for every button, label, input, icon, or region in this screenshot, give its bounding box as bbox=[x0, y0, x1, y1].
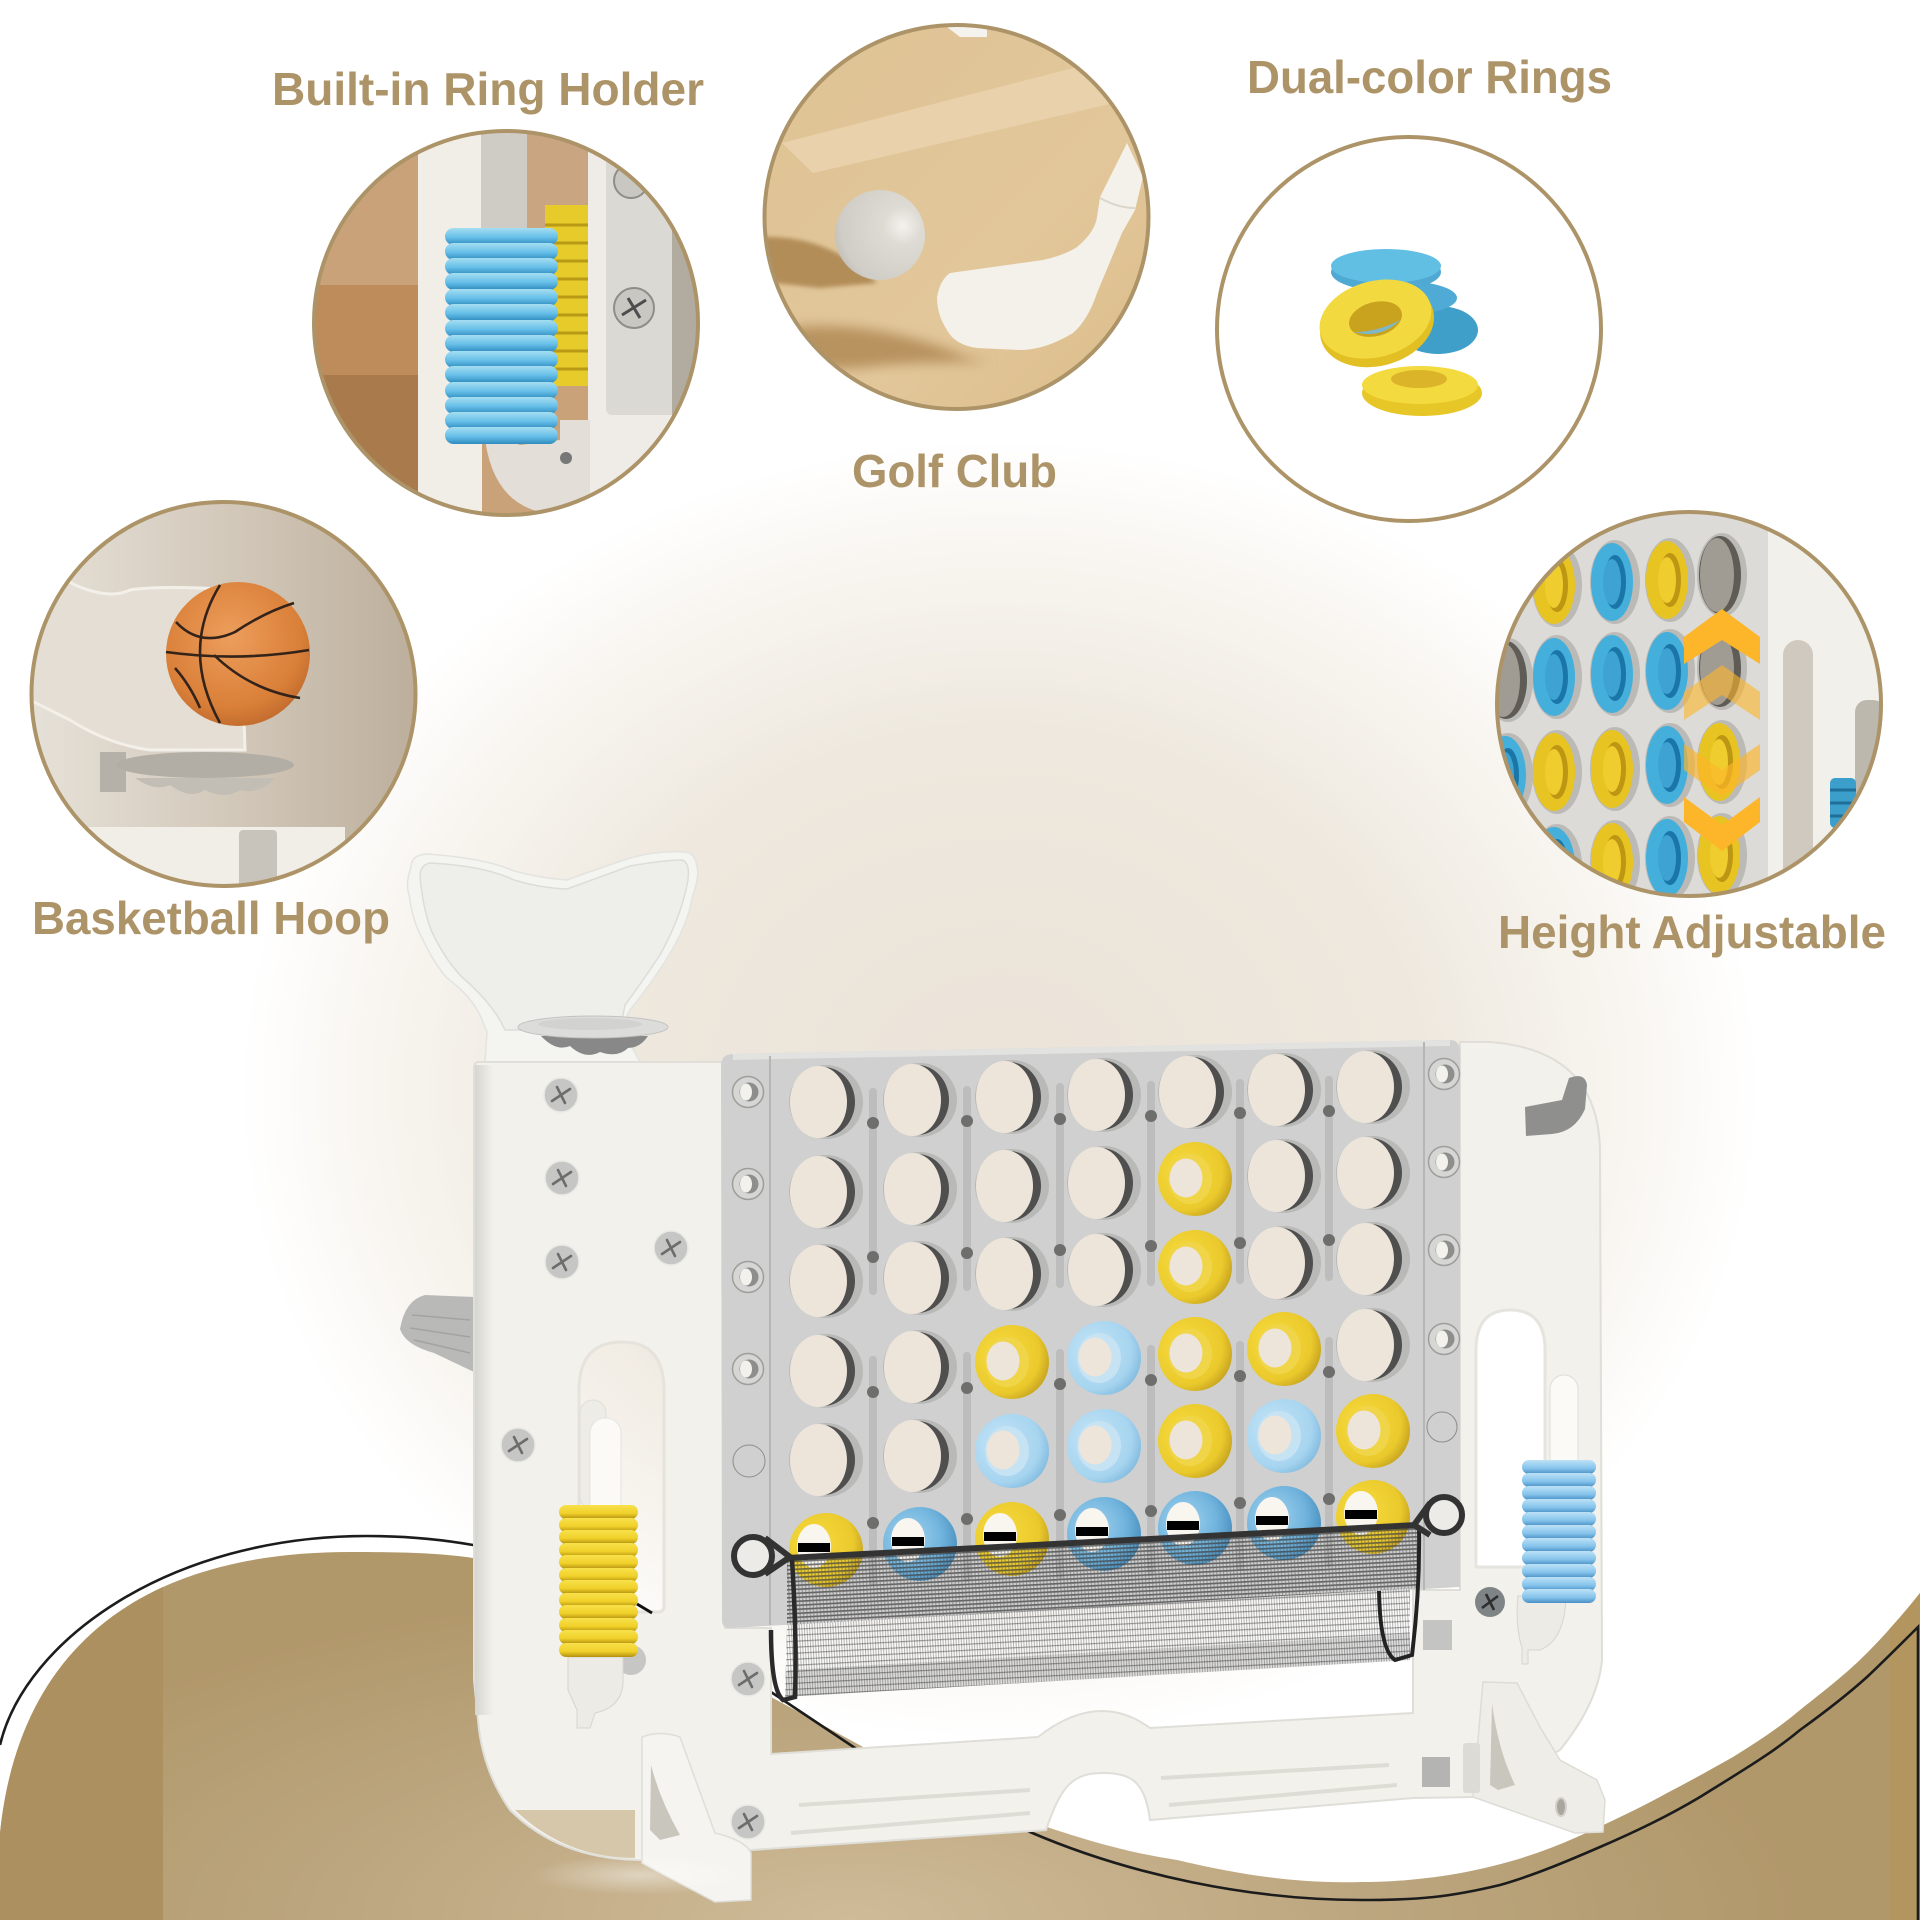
dark screw right bbox=[1475, 1587, 1505, 1617]
icon: blue ring stack bbox=[1830, 778, 1856, 828]
yellow discs bbox=[975, 1142, 1410, 1478]
grey game board bbox=[721, 1040, 1460, 1628]
icon: hook bracket bbox=[484, 420, 590, 512]
icon: blue ring stack bbox=[445, 228, 558, 444]
icon: golf club holder at left bbox=[400, 1295, 474, 1372]
heading: Built-in Ring Holder: Built-in Ring Holder bbox=[272, 63, 704, 115]
left peg bbox=[568, 1400, 646, 1728]
icon: lying yellow ring bbox=[1362, 366, 1482, 416]
storage net bbox=[734, 1497, 1462, 1700]
pillar markers bbox=[1422, 1620, 1480, 1793]
heading: Height Adjustable: Height Adjustable bbox=[1498, 906, 1886, 958]
column sliders bbox=[869, 1076, 1333, 1586]
callout circle: basketball hoop bbox=[30, 500, 420, 897]
yellow ring stack bbox=[559, 1505, 638, 1657]
icon: golf club head bbox=[937, 143, 1143, 350]
board holes in close-up bbox=[1483, 533, 1747, 908]
right peg bbox=[1517, 1375, 1578, 1664]
bottom row discs bbox=[789, 1480, 1410, 1587]
left slot bbox=[579, 1342, 664, 1612]
body base shading bbox=[515, 1810, 635, 1858]
callout circle: height adjustable bbox=[1483, 505, 1893, 908]
side knobs bbox=[732, 1058, 1460, 1477]
heading: Dual-color Rings: Dual-color Rings bbox=[1247, 51, 1612, 103]
callout circle: dual-color rings bbox=[1217, 137, 1601, 521]
icon: basketball bbox=[166, 582, 310, 726]
bar grooves bbox=[791, 1765, 1397, 1833]
arrow: up chevrons bbox=[1684, 609, 1760, 720]
icon: yellow ring stack behind bbox=[545, 205, 588, 386]
foot glow bbox=[530, 1855, 750, 1895]
blue ring stack bbox=[1522, 1460, 1596, 1603]
empty holes bbox=[789, 1050, 1410, 1497]
icon: blue rings bbox=[1331, 249, 1478, 354]
black accent curve bbox=[0, 1536, 1918, 1920]
hoop plate bbox=[518, 1016, 668, 1055]
screws on body bbox=[501, 1078, 765, 1839]
arrow: down chevrons bbox=[1684, 744, 1760, 851]
blue discs bbox=[975, 1321, 1321, 1488]
icon: tilted yellow ring bbox=[1310, 267, 1444, 379]
net loop left bbox=[734, 1537, 790, 1575]
right slot bbox=[1476, 1310, 1545, 1567]
left foot bbox=[642, 1734, 751, 1902]
heading: Golf Club: Golf Club bbox=[852, 445, 1057, 497]
main white frame bbox=[474, 1042, 1602, 1860]
body left edge shading bbox=[475, 1065, 493, 1715]
heading: Basketball Hoop: Basketball Hoop bbox=[32, 892, 390, 944]
callout circle: ring holder bbox=[310, 130, 712, 525]
right foot bbox=[1473, 1682, 1605, 1833]
callout circle: golf club bbox=[760, 20, 1160, 415]
net loop right bbox=[1414, 1497, 1462, 1535]
icon: hoop rim bbox=[116, 752, 294, 795]
short black line through slot bbox=[637, 1604, 652, 1613]
icon: side hook bbox=[1525, 1076, 1587, 1136]
backboard bbox=[407, 852, 698, 1062]
tan floor wave bbox=[0, 1552, 1920, 1920]
product: ring game whale-shaped board bbox=[400, 852, 1605, 1902]
icon: screws bbox=[614, 164, 654, 328]
icon: golf ball bbox=[835, 190, 925, 280]
